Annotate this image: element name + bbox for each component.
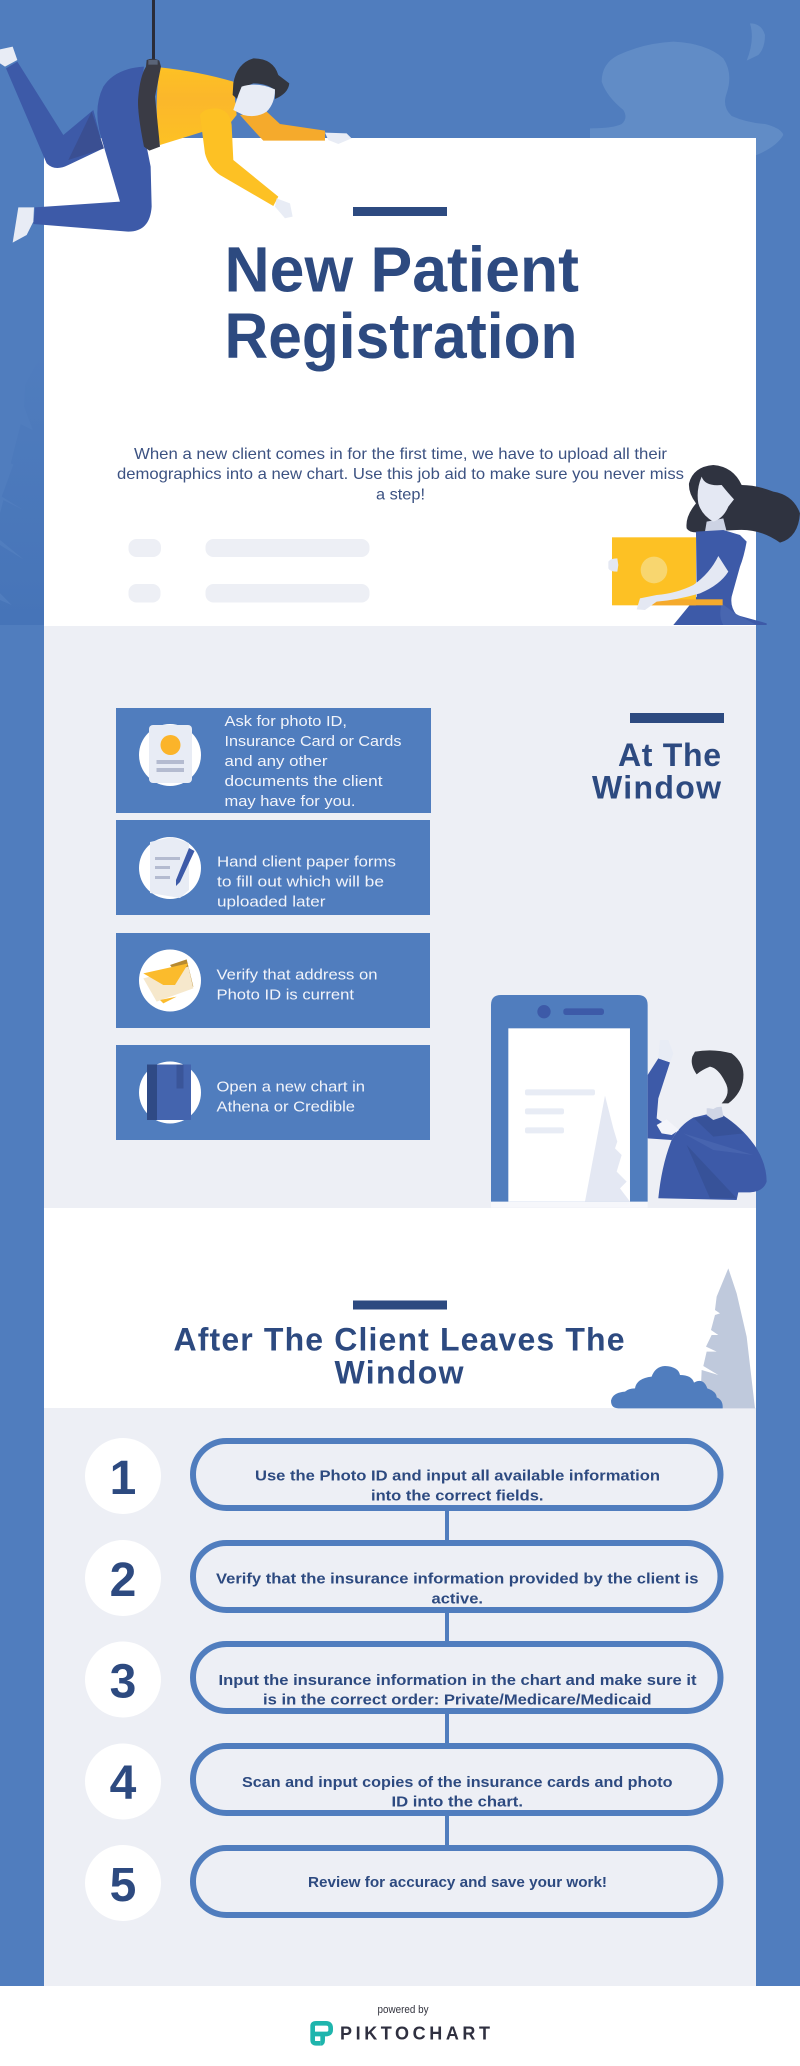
card 4 text (216, 1078, 365, 1116)
step 1 (85, 1438, 720, 1514)
card 1 text (224, 713, 402, 810)
card 1 (116, 708, 431, 813)
step 5: 5 (110, 1859, 136, 1912)
step 2: active. (432, 1590, 483, 1608)
heading: at the window: Window (592, 770, 721, 806)
background blob top right (590, 23, 783, 155)
panel: footer (0, 1986, 800, 2066)
card 2 text: to fill out which will be (217, 874, 384, 890)
background tree left (0, 350, 44, 625)
connectors between steps (445, 1511, 449, 1845)
decorative bar: after client (353, 1300, 447, 1310)
illustration: woman holding yellow folder (608, 465, 800, 625)
card 3 text: Verify that address on (216, 966, 378, 984)
card 3 text (216, 966, 378, 1004)
step 5 (85, 1845, 720, 1921)
heading: at the window (592, 737, 721, 806)
card 1 text: may have for you. (224, 793, 356, 810)
panel: steps (44, 1408, 756, 1986)
icon: chart book (139, 1062, 201, 1124)
icon: paper form and pen (139, 837, 201, 899)
step 5: Review for accuracy and save your work! (308, 1874, 607, 1891)
footer credit: powered by (378, 2004, 429, 2016)
panel: at the window (44, 626, 756, 1208)
card 2 (116, 820, 430, 915)
step 4: Scan and input copies of the insurance cards and photo (242, 1774, 672, 1791)
step 2 (85, 1540, 720, 1616)
heading: after the client leaves the window (174, 1322, 624, 1390)
footer credit (313, 2004, 490, 2044)
footer credit: PIKTOCHART (340, 2024, 490, 2044)
heading: after the client leaves the window: Window (334, 1354, 464, 1390)
step 3: Input the insurance information in the chart and make sure it (218, 1672, 696, 1689)
step 3: is in the correct order: Private/Medicare/Medicaid (263, 1692, 652, 1708)
card 1 text: and any other (224, 753, 328, 770)
intro paragraph: demographics into a new chart. Use this job aid to make sure you never miss (117, 466, 684, 483)
intro paragraph (117, 446, 684, 504)
step 4: ID into the chart. (392, 1794, 523, 1810)
card 2 text: uploaded later (217, 894, 326, 910)
illustration: phone and man (491, 995, 767, 1208)
icon: piktochart logo (313, 2023, 331, 2043)
card 1 text: Insurance Card or Cards (224, 733, 402, 750)
placeholder pills (128, 539, 370, 602)
icon: envelope (139, 950, 201, 1012)
intro paragraph: a step! (376, 486, 425, 504)
white panel: header (44, 138, 756, 626)
icon: id document (139, 724, 201, 786)
step 4: 4 (110, 1757, 137, 1810)
intro paragraph: When a new client comes in for the first time, we have to upload all their (134, 446, 668, 463)
step 1: 1 (110, 1452, 136, 1505)
step 2: Verify that the insurance information provided by the client is (216, 1570, 698, 1588)
illustration: tree and bush (611, 1268, 755, 1408)
step 3: 3 (110, 1656, 136, 1708)
card 4 (116, 1045, 430, 1140)
step 1: into the correct fields. (371, 1488, 544, 1504)
heading: after the client leaves the window: After The Client Leaves The (174, 1322, 624, 1358)
step 2: 2 (110, 1554, 136, 1607)
step 3 (85, 1642, 720, 1718)
heading: at the window: At The (618, 737, 721, 773)
title (224, 234, 579, 372)
card 4 text: Athena or Credible (216, 1098, 355, 1116)
card 4 text: Open a new chart in (216, 1078, 365, 1096)
illustration: man hanging from rope (0, 0, 352, 243)
card 2 text: Hand client paper forms (217, 854, 396, 870)
decorative bar: title (353, 207, 447, 216)
card 3 text: Photo ID is current (216, 986, 355, 1004)
card 2 text (217, 854, 396, 910)
step 4 (85, 1744, 720, 1820)
title: Registration (224, 300, 578, 372)
card 3 (116, 933, 430, 1028)
card 1 text: documents the client (224, 773, 383, 790)
title: New Patient (224, 234, 579, 306)
panel: after client heading (44, 1208, 756, 1408)
card 1 text: Ask for photo ID, (224, 713, 347, 730)
step 1: Use the Photo ID and input all available information (255, 1468, 660, 1484)
decorative bar: at the window (630, 713, 724, 723)
